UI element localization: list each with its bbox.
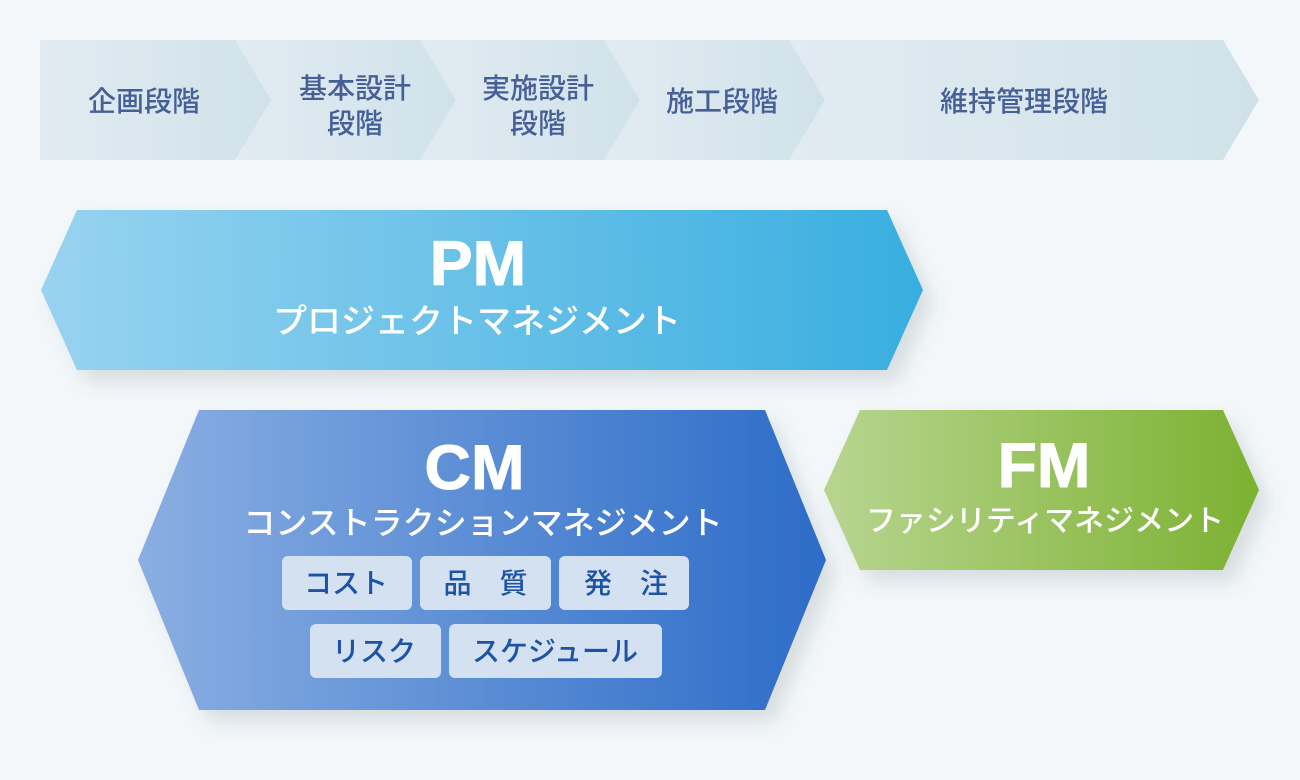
tag: 品質: 品 質 bbox=[443, 562, 528, 602]
stage: 施工段階: 施工段階 bbox=[666, 80, 778, 120]
tag: 発注 bbox=[559, 556, 689, 610]
tag: リスク: リスク bbox=[332, 630, 416, 670]
stage: 企画段階: 企画段階 bbox=[88, 80, 200, 120]
panel: PM bbox=[41, 210, 923, 370]
PM subtitle: プロジェクトマネジメント bbox=[273, 294, 681, 343]
stage: 施工段階 bbox=[604, 40, 825, 160]
PM hexagon bbox=[41, 210, 923, 370]
tag: コスト bbox=[282, 556, 412, 610]
FM subtitle: ファシリティマネジメント bbox=[866, 496, 1224, 540]
FM heading: FM bbox=[998, 431, 1090, 501]
stage: 基本設計段階 bbox=[235, 40, 456, 160]
FM hexagon bbox=[824, 410, 1259, 570]
stage: 企画段階 bbox=[40, 40, 271, 160]
CM subtitle: コンストラクションマネジメント bbox=[243, 498, 723, 544]
tag: スケジュール bbox=[449, 624, 662, 678]
stage arrows bbox=[40, 40, 1259, 160]
tag: コスト: コスト bbox=[304, 562, 388, 602]
panel: FM bbox=[824, 410, 1259, 570]
CM heading: CM bbox=[425, 433, 524, 503]
tag: 品質 bbox=[420, 556, 551, 610]
CM hexagon bbox=[138, 410, 826, 710]
stage: 維持管理段階 bbox=[789, 40, 1259, 160]
stage: 基本設計段階: 基本設計 bbox=[299, 67, 411, 107]
tag: リスク bbox=[310, 624, 441, 678]
stage: 実施設計段階: 段階 bbox=[510, 102, 566, 142]
stage: 実施設計段階 bbox=[420, 40, 640, 160]
panel: CM bbox=[138, 410, 826, 710]
stage: 実施設計段階: 実施設計 bbox=[482, 67, 594, 107]
PM heading: PM bbox=[430, 229, 526, 299]
stage: 維持管理段階: 維持管理段階 bbox=[940, 80, 1108, 120]
tag: スケジュール: スケジュール bbox=[472, 630, 638, 670]
stage: 基本設計段階: 段階 bbox=[327, 102, 383, 142]
tag: 発注: 発 注 bbox=[584, 562, 668, 602]
